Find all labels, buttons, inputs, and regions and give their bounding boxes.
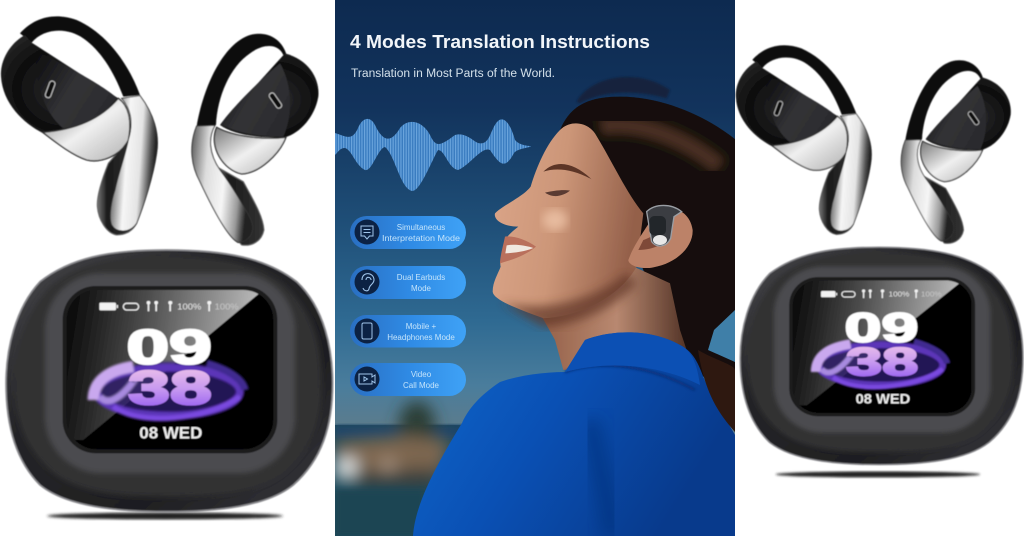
panel: translation modes bbox=[335, 0, 740, 536]
mode 4: video call: Call Mode bbox=[403, 381, 440, 390]
clock digits: 09 bbox=[845, 305, 918, 350]
earbud in ear bbox=[647, 205, 682, 246]
island and water bbox=[335, 396, 462, 536]
icon: right earbud bbox=[192, 34, 318, 245]
mode 2: dual earbuds: Dual Earbuds bbox=[397, 273, 445, 282]
mode 3: mobile + headphones: Headphones Mode bbox=[387, 333, 455, 342]
icon: ear bbox=[362, 274, 374, 291]
mouth bbox=[500, 236, 536, 263]
icon: phone bbox=[362, 323, 372, 339]
waveform bbox=[335, 119, 531, 191]
clock digits: 09 bbox=[127, 320, 212, 374]
charging case bbox=[6, 250, 333, 512]
mode 3: mobile + headphones bbox=[350, 315, 466, 348]
woman portrait bbox=[493, 77, 740, 377]
mode 2: dual earbuds: Mode bbox=[411, 284, 432, 293]
mode 1: simultaneous interpretation: Simultaneous bbox=[397, 223, 445, 232]
mode 2: dual earbuds bbox=[350, 266, 466, 299]
icon: video bbox=[359, 374, 375, 384]
status bar bbox=[821, 290, 942, 298]
mode 1: simultaneous interpretation: Interpretation Mode bbox=[382, 234, 461, 243]
ear bbox=[628, 208, 693, 268]
status bar: 100% bbox=[177, 301, 202, 311]
charging case bbox=[740, 247, 1023, 465]
jaw shadow bbox=[500, 273, 637, 327]
icon: left earbud bbox=[736, 45, 871, 234]
shadow under case bbox=[776, 471, 980, 477]
sky background bbox=[335, 0, 735, 435]
purple swirl bbox=[816, 340, 947, 387]
neck bbox=[540, 263, 693, 370]
cheek highlight bbox=[542, 209, 568, 231]
screen bbox=[67, 290, 273, 449]
charging case: 38 bbox=[846, 340, 918, 384]
eyebrow bbox=[543, 164, 592, 179]
shirt bbox=[413, 332, 735, 536]
sky patch right bbox=[708, 310, 735, 362]
icon: right earbud bbox=[901, 60, 1011, 243]
status bar: 100% bbox=[921, 290, 942, 298]
status bar: 100% bbox=[889, 290, 910, 298]
date: 08 WED bbox=[856, 391, 910, 407]
ponytail bbox=[698, 350, 735, 432]
icon: speech bubble bbox=[361, 226, 373, 239]
purple swirl bbox=[93, 362, 245, 418]
mode 4: video call: Video bbox=[411, 370, 432, 379]
charging case: 38 bbox=[128, 362, 212, 415]
subheading: Translation in Most Parts of the World. bbox=[351, 68, 555, 80]
icon: left earbud bbox=[1, 16, 158, 235]
screen bbox=[793, 280, 972, 413]
status bar bbox=[99, 301, 239, 311]
hair bbox=[560, 97, 740, 377]
eye bbox=[545, 190, 570, 196]
mode 3: mobile + headphones: Mobile + bbox=[406, 322, 437, 331]
shadow under case bbox=[47, 512, 283, 520]
mode 4: video call bbox=[350, 363, 466, 396]
date: 08 WED bbox=[139, 423, 202, 442]
heading: 4 Modes Translation Instructions bbox=[350, 32, 650, 52]
panel: left product bbox=[1, 16, 333, 520]
status bar: 100% bbox=[215, 301, 239, 311]
mode 1: simultaneous interpretation bbox=[350, 216, 466, 249]
face bbox=[493, 123, 643, 318]
panel: right product bbox=[736, 45, 1023, 477]
